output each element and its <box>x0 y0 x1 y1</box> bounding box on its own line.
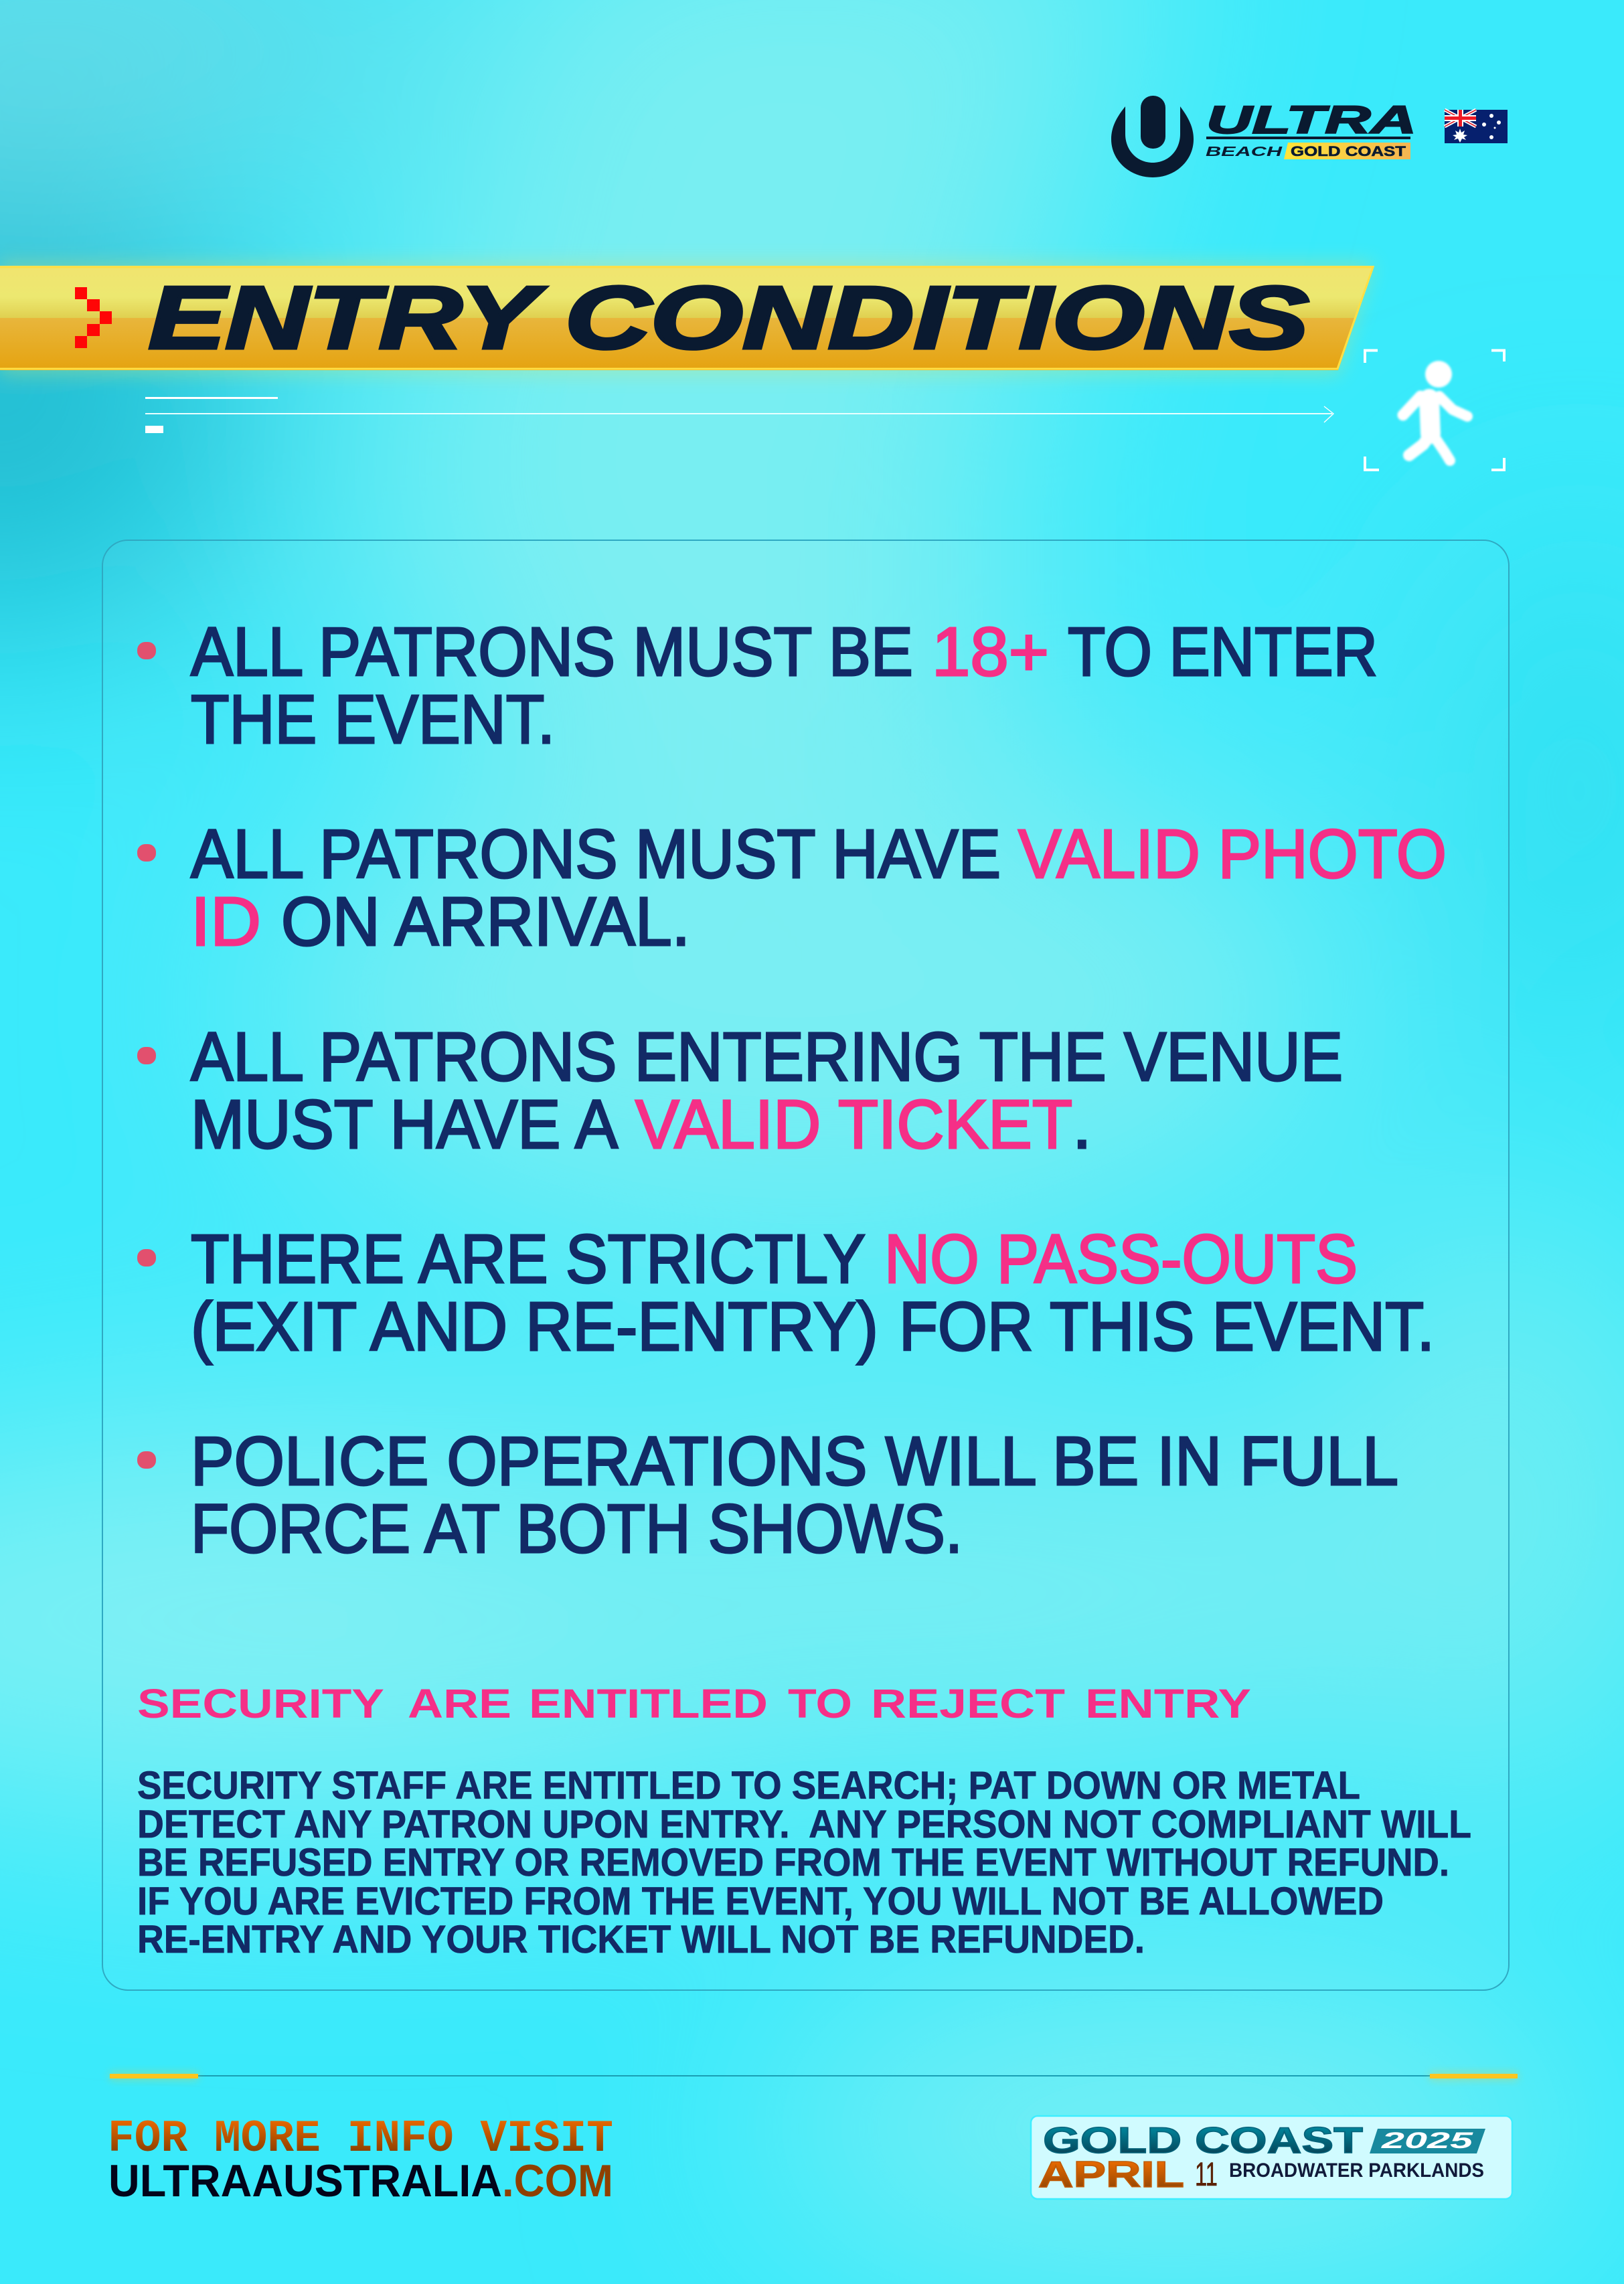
security heading: ENTRY <box>1085 1681 1251 1726</box>
logo word BEACH: BEACH <box>1206 145 1283 159</box>
year badge: 2025 <box>1380 2128 1474 2153</box>
footer divider <box>110 2072 1518 2080</box>
condition 3: valid ticket: VALID TICKET <box>635 1086 1072 1163</box>
logo rule <box>1206 137 1410 139</box>
venue: BROADWATER PARKLANDS <box>1229 2159 1484 2182</box>
security details: BE REFUSED ENTRY OR REMOVED FROM THE EVENT WITHOUT REFUND. <box>137 1841 1449 1884</box>
condition 2: photo ID <box>137 815 1447 960</box>
footer: event date and venue panel <box>1031 2116 1512 2199</box>
banner edge highlight <box>0 267 1373 369</box>
security details: IF YOU ARE EVICTED FROM THE EVENT, YOU WILL NOT BE ALLOWED <box>137 1880 1384 1923</box>
title: ENTRY <box>149 268 546 367</box>
panel background <box>1031 2116 1512 2199</box>
panel: conditions card <box>102 540 1509 1990</box>
condition 5: police: FORCE AT BOTH SHOWS. <box>191 1490 963 1567</box>
icon: Ultra U mark <box>1111 96 1194 177</box>
condition 2: photo ID: ALL PATRONS MUST HAVE <box>191 815 1001 892</box>
condition 3: valid ticket: MUST HAVE A <box>191 1086 618 1163</box>
condition 1: age: 18+ <box>932 613 1049 690</box>
condition 4: no pass-outs <box>137 1220 1435 1365</box>
condition 5: police <box>137 1422 1398 1567</box>
logo: Ultra Beach Gold Coast <box>1111 96 1416 177</box>
icon: walking person in frame <box>1365 351 1504 470</box>
title <box>149 268 1309 367</box>
arrow and decorative ticks <box>145 397 1333 433</box>
condition 4: no pass-outs: NO PASS-OUTS <box>884 1220 1358 1297</box>
banner glow <box>0 262 1374 375</box>
footer: website call to action <box>108 2113 613 2206</box>
icon: red pixel chevron <box>75 287 112 348</box>
walking figure <box>1403 361 1467 461</box>
security details: DETECT ANY PATRON UPON ENTRY. ANY PERSON NOT COMPLIANT WILL <box>137 1803 1471 1846</box>
condition 1: age: TO ENTER <box>1068 613 1378 690</box>
condition 4: no pass-outs: THERE ARE STRICTLY <box>191 1220 866 1297</box>
title banner <box>0 262 1374 375</box>
frame corners <box>1365 351 1504 470</box>
security heading: TO <box>788 1681 852 1726</box>
condition 5: police: POLICE OPERATIONS WILL BE IN FULL <box>191 1422 1398 1499</box>
condition 3: valid ticket: ALL PATRONS ENTERING THE VENUE <box>191 1018 1343 1095</box>
security heading: ARE <box>408 1681 511 1726</box>
gold coast tag <box>1284 143 1410 159</box>
condition 2: photo ID: ON ARRIVAL. <box>281 883 690 960</box>
condition 2: photo ID: VALID PHOTO <box>1018 815 1447 892</box>
security details: RE-ENTRY AND YOUR TICKET WILL NOT BE REFUNDED. <box>137 1918 1145 1961</box>
security details <box>137 1764 1471 1961</box>
condition 4: no pass-outs: (EXIT AND RE-ENTRY) <box>191 1288 878 1365</box>
gold coast tag text: GOLD COAST <box>1291 144 1406 159</box>
condition 1: age <box>137 613 1378 758</box>
security heading <box>137 1681 1251 1726</box>
condition 1: age: ALL PATRONS MUST BE <box>191 613 913 690</box>
security heading: REJECT <box>871 1681 1065 1726</box>
for more info label: FOR MORE INFO VISIT <box>108 2113 613 2165</box>
condition 1: age: THE EVENT. <box>191 681 555 758</box>
website name: ULTRAAUSTRALIA <box>108 2155 502 2206</box>
banner shape <box>0 266 1374 370</box>
logo word ULTRA: ULTRA <box>1206 98 1416 142</box>
security heading: ENTITLED <box>529 1681 768 1726</box>
condition 3: valid ticket: . <box>1072 1086 1092 1163</box>
condition 3: valid ticket <box>137 1018 1343 1163</box>
security heading: SECURITY <box>137 1681 384 1726</box>
year badge <box>1370 2128 1485 2153</box>
website suffix: .COM <box>502 2155 613 2206</box>
security details: SECURITY STAFF ARE ENTITLED TO SEARCH; PAT DOWN OR METAL <box>137 1764 1360 1807</box>
location: GOLD COAST <box>1043 2119 1363 2161</box>
icon: Australian flag <box>1445 110 1508 143</box>
title: CONDITIONS <box>565 268 1309 367</box>
condition 2: photo ID: ID <box>191 883 261 960</box>
month: APRIL <box>1038 2153 1184 2195</box>
card background <box>102 540 1509 1990</box>
condition 4: no pass-outs: FOR THIS EVENT. <box>899 1288 1435 1365</box>
day: 11 <box>1195 2155 1218 2193</box>
